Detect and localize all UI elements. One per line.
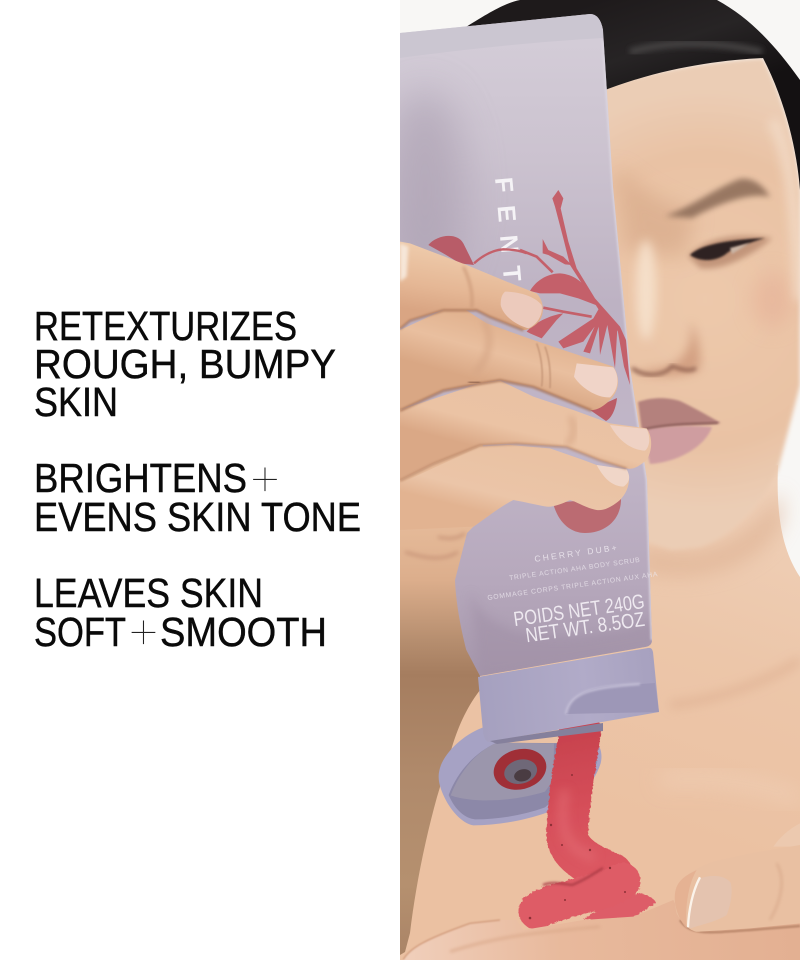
second flower piece (590, 398, 617, 421)
scrub column (567, 730, 612, 874)
scrub ribbon (529, 730, 656, 920)
panel: product photo (385, 0, 800, 960)
palm (403, 900, 800, 960)
finger one (400, 242, 543, 330)
tube shading (385, 40, 655, 680)
benefit: leaves skin soft: + (128, 602, 160, 662)
model body and neck (400, 465, 800, 960)
flower stem (552, 190, 626, 340)
tube product label: TRIPLE ACTION AHA BODY SCRUB (509, 557, 641, 582)
thumb (675, 845, 800, 932)
hair sheen (630, 44, 762, 52)
nose (632, 320, 700, 376)
model face (600, 58, 800, 550)
model hair (466, 0, 800, 190)
palm crease (405, 533, 465, 558)
thumb underside shadow (680, 920, 800, 932)
flower top petal (530, 273, 600, 307)
scrub highlight (563, 790, 595, 858)
finger four (400, 445, 629, 530)
scrub speckles (529, 774, 626, 919)
scrub crease (543, 868, 603, 885)
tube brand name: FENT (489, 176, 527, 295)
knuckle shade (475, 320, 489, 373)
benefit: leaves skin soft (34, 570, 327, 662)
benefit: brightens: + (249, 449, 281, 509)
knuckle creases (537, 343, 550, 388)
palm (400, 440, 510, 722)
benefit: retexturizes: ROUGH, BUMPY (34, 341, 336, 387)
benefit: retexturizes (34, 303, 336, 425)
tube product label: CHERRY DUB+ (534, 542, 619, 564)
flower arc (520, 250, 553, 272)
cap thumb notch (566, 683, 659, 714)
tube product label (487, 542, 659, 647)
flower branch (543, 239, 572, 265)
benefit: leaves skin soft: SOFT (34, 609, 126, 655)
holding hand (400, 242, 651, 722)
scrub tail (583, 893, 656, 920)
arm (400, 650, 480, 955)
tube product label: POIDS NET 240G (512, 590, 646, 631)
other finger (773, 823, 800, 847)
cap bottom edge (490, 723, 603, 744)
tube body (385, 14, 659, 680)
tube crimp (400, 14, 603, 44)
flower lower left petal (527, 313, 563, 338)
tube screw cap (478, 648, 659, 744)
lips (638, 398, 721, 464)
receiving hand (403, 823, 800, 960)
palm crease (450, 927, 600, 952)
scrub lower band (537, 881, 622, 911)
benefit: retexturizes: RETEXTURIZES (34, 303, 297, 349)
benefit: brightens: BRIGHTENS (34, 455, 247, 501)
panel: benefits text (34, 303, 361, 662)
thumb wrinkles (770, 863, 782, 920)
tube product label: NET WT. 8.5OZ (524, 608, 646, 647)
eye (688, 236, 772, 268)
flower graphic (520, 190, 630, 385)
benefit: leaves skin soft: SMOOTH (160, 609, 327, 655)
thumbnail (687, 876, 732, 928)
benefit: retexturizes: SKIN (34, 379, 118, 425)
palm top edge (403, 920, 500, 959)
bottom circle graphic (553, 497, 621, 533)
benefit: brightens (34, 449, 361, 540)
face shading (617, 178, 694, 259)
flower line (543, 308, 592, 317)
benefit: leaves skin soft: LEAVES SKIN (34, 570, 263, 616)
flip cap (439, 727, 601, 825)
benefit: brightens: EVENS SKIN TONE (34, 494, 361, 540)
left leaf graphic (428, 236, 527, 265)
photo backdrop (400, 0, 800, 576)
cap nozzle ring (494, 748, 546, 790)
tube product label: GOMMAGE CORPS TRIPLE ACTION AUX AHA (487, 571, 659, 602)
flower fan (558, 307, 630, 385)
finger three (400, 381, 651, 481)
finger two (400, 308, 618, 411)
eyebrow (665, 179, 770, 218)
